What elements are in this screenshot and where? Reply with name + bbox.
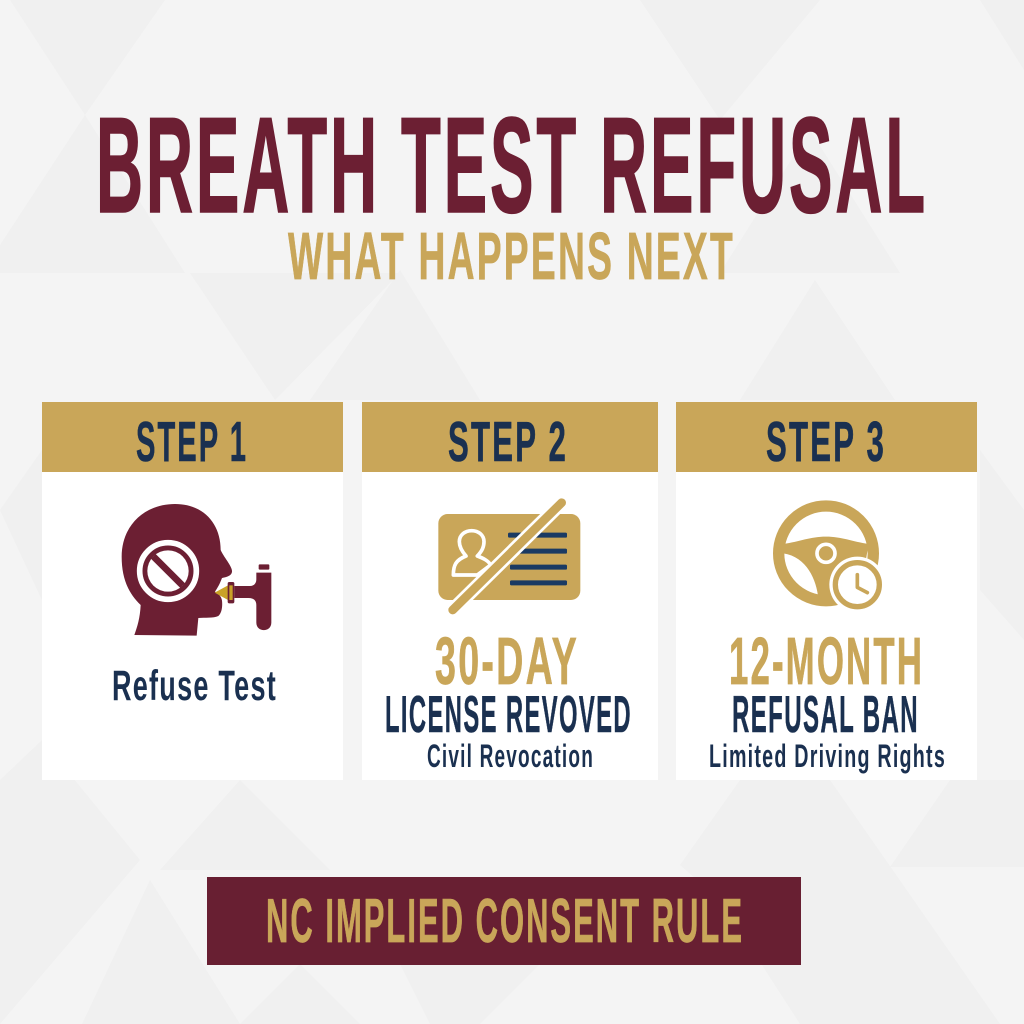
icon: steering wheel with clock [779,506,885,613]
step 1 header: STEP 1 [136,410,248,474]
panel: step 1 [42,402,343,780]
step 2 header [362,402,658,474]
icon: head refusing breathalyzer [122,504,271,636]
icon: crossed-out licence [438,503,580,610]
step 2 duration: 30-DAY [435,624,579,699]
panel: step 2: LICENSE REVOVED [385,686,632,744]
step 1 header [42,402,343,474]
banner [207,877,801,965]
step 3 header: STEP 3 [766,410,886,474]
panel: step 2 [362,402,658,780]
step 2 header: STEP 2 [448,410,568,474]
step 2 note: Civil Revocation [427,738,594,774]
step 1 label: Refuse Test [112,662,277,710]
panel: step 3 [676,402,977,780]
step 3 header [676,402,977,474]
